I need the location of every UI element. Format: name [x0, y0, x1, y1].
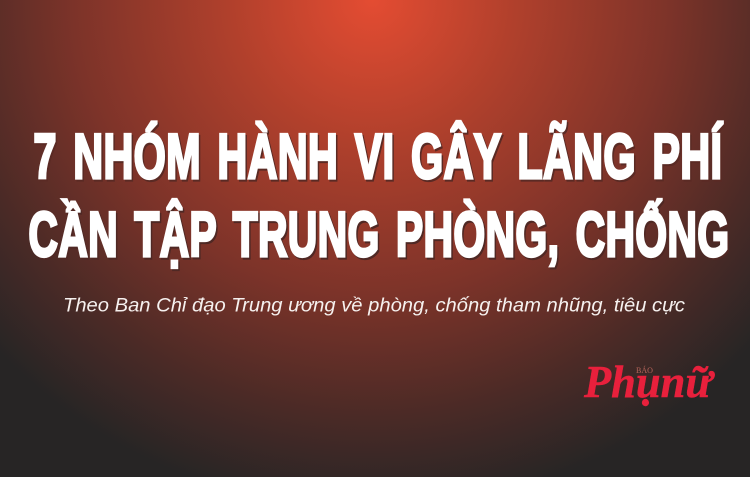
logo wordmark: Phụnữ	[583, 356, 715, 407]
title	[28, 121, 731, 272]
logo small word: BÁO	[636, 365, 653, 375]
subtitle: Theo Ban Chỉ đạo Trung ương về phòng, chống tham nhũng, tiêu cực	[63, 296, 686, 316]
logo: Báo Phụ Nữ	[583, 356, 715, 407]
